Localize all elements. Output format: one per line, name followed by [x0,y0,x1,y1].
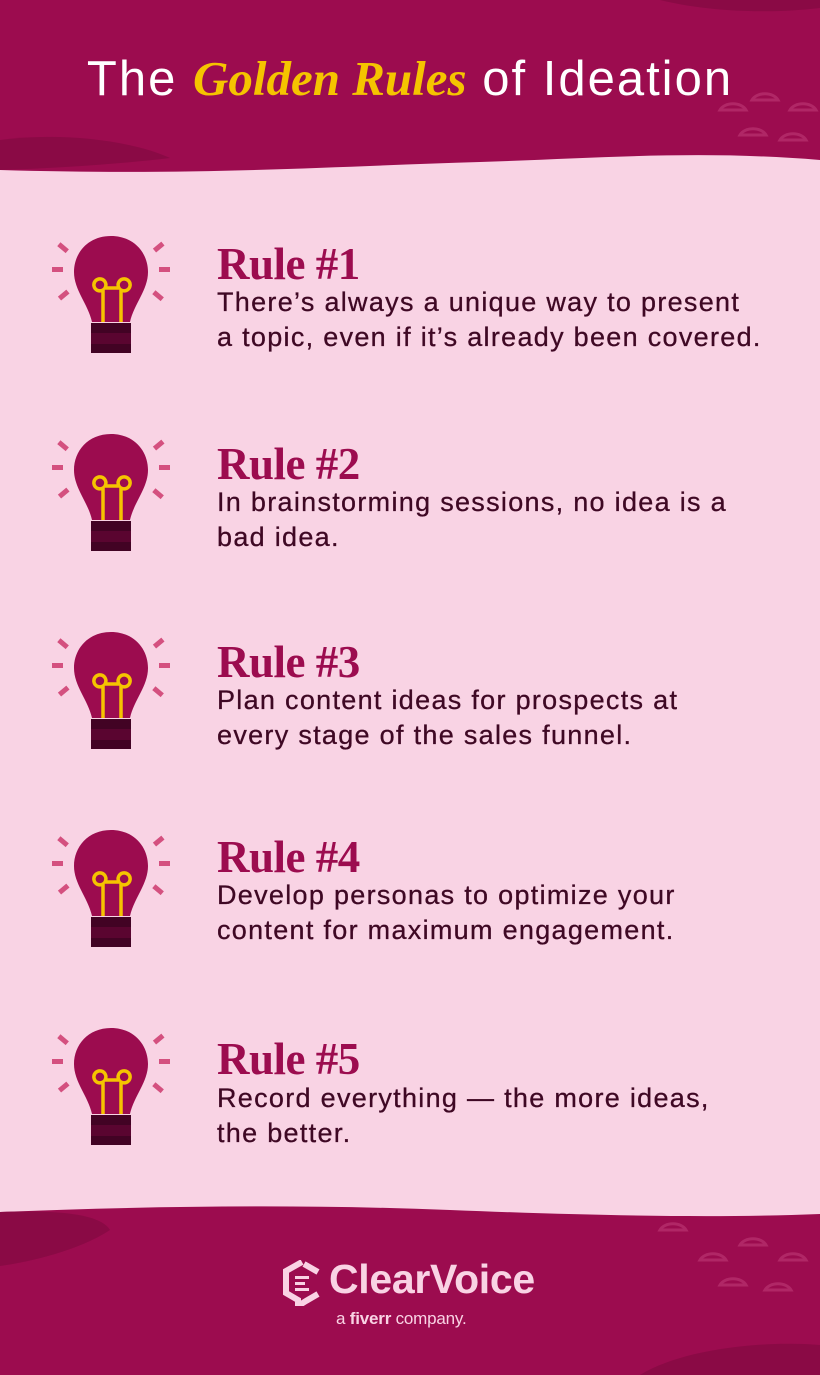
rule 1 [52,236,762,353]
title: The Golden Rules of Ideation [87,51,733,106]
icon: lightbulb [52,830,170,947]
text [217,685,678,750]
rule 2 [52,434,727,552]
icon: lightbulb [52,236,170,353]
rule 3 [52,632,678,750]
text: content for maximum engagement. [217,915,675,945]
heading: Rule #3 [217,637,360,687]
heading: Rule #2 [217,439,360,489]
icon: lightbulb [52,1028,170,1145]
text: Plan content ideas for prospects at [217,685,678,715]
text: bad idea. [217,522,340,552]
rule 5 [52,1028,710,1148]
footer band [0,1206,820,1375]
text [217,880,676,945]
header band [0,0,820,172]
text: Record everything — the more ideas, [217,1083,710,1113]
rule 4 [52,830,676,947]
text: There’s always a unique way to present [217,287,740,317]
text: a topic, even if it’s already been covered. [217,322,762,352]
text: every stage of the sales funnel. [217,720,632,750]
heading: Rule #4 [217,832,360,882]
text [217,287,762,352]
text: In brainstorming sessions, no idea is a [217,487,727,517]
icon: logo mark [283,1260,320,1306]
icon: lightbulb [52,434,170,551]
text: the better. [217,1118,351,1148]
icon: lightbulb [52,632,170,749]
heading: Rule #5 [217,1034,360,1084]
tagline: a fiverr company. [336,1309,466,1328]
text: Develop personas to optimize your [217,880,676,910]
text [217,487,727,552]
text [217,1083,710,1148]
brand name: ClearVoice [329,1256,535,1302]
logo: ClearVoice [283,1256,535,1328]
heading: Rule #1 [217,239,360,289]
